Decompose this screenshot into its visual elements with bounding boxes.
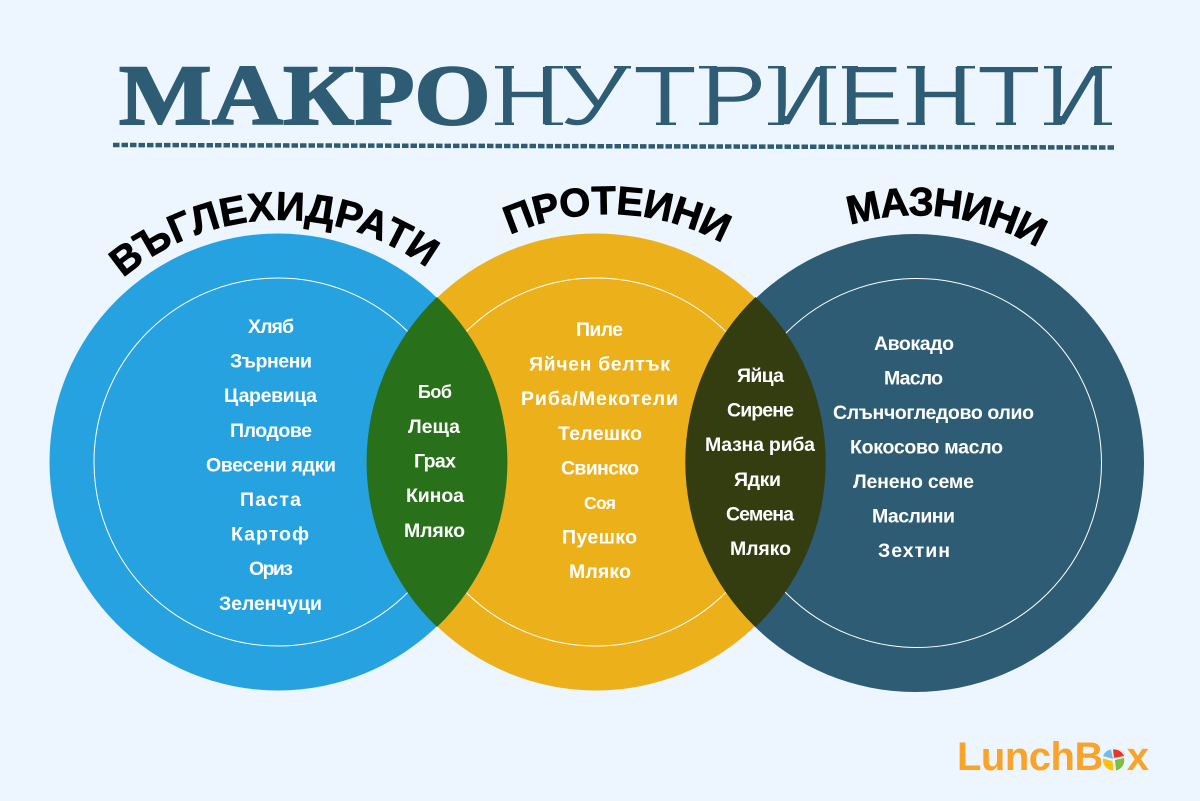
panel: carbohydrates circle [50, 234, 506, 690]
list: carbohydrates: Зърнени [230, 351, 312, 373]
list: proteins and fats overlap: Сирене [727, 400, 794, 422]
list: proteins: Соя [584, 493, 616, 513]
list: carbohydrates and proteins overlap: Грах [414, 450, 456, 472]
list: carbohydrates: Овесени ядки [206, 454, 336, 476]
title light-part slab serifs [495, 66, 1112, 125]
list: carbohydrates and proteins overlap: Мляко [404, 520, 465, 542]
list: proteins: Яйчен белтък [529, 354, 670, 376]
list: proteins: Риба/Мекотели [521, 388, 678, 410]
list: carbohydrates and proteins overlap: Боб [418, 382, 452, 402]
title dashed underline [113, 145, 1116, 148]
list: proteins: Пиле [576, 319, 623, 341]
list: fats: Кокосово масло [850, 436, 1003, 458]
list: proteins: Мляко [569, 561, 631, 583]
list: proteins and fats overlap: Семена [726, 503, 794, 525]
heading: carbohydrates: ВЪГЛЕХИДРАТИ [108, 192, 440, 276]
list: proteins and fats overlap: Мляко [730, 538, 791, 560]
list: carbohydrates: Картоф [231, 524, 309, 546]
list: proteins: Телешко [558, 423, 642, 445]
overlap: carbohydrates and proteins [367, 297, 507, 627]
title: МАКРО [119, 48, 491, 143]
title: НУТРИЕНТИ [493, 51, 1112, 152]
list: proteins and fats overlap [705, 365, 815, 560]
list: proteins and fats overlap: Ядки [734, 469, 781, 491]
list: carbohydrates and proteins overlap: Леща [408, 416, 460, 438]
panel: proteins circle [368, 234, 824, 690]
list: proteins [521, 319, 678, 583]
list: carbohydrates: Хляб [248, 316, 294, 338]
list: carbohydrates and proteins overlap [404, 382, 465, 542]
list: proteins: Пуешко [562, 527, 637, 549]
list: carbohydrates: Зеленчуци [219, 593, 322, 615]
panel: fats circle [686, 234, 1144, 692]
list: proteins and fats overlap: Мазна риба [705, 434, 815, 456]
list: fats: Слънчогледово олио [833, 402, 1034, 424]
list: carbohydrates and proteins overlap: Киноа [406, 485, 464, 507]
list: fats: Ленено семе [853, 471, 974, 493]
list: carbohydrates [206, 316, 336, 615]
list: proteins and fats overlap: Яйца [737, 365, 784, 387]
list: fats: Масло [884, 368, 943, 390]
list: carbohydrates: Царевица [224, 385, 317, 407]
heading: fats: МАЗНИНИ [846, 187, 1048, 246]
overlap: proteins and fats [685, 297, 826, 627]
list: fats: Зехтин [878, 540, 950, 562]
icon: pie in logo [1101, 748, 1126, 772]
list: proteins: Свинско [561, 457, 639, 479]
list: fats [833, 333, 1034, 562]
title [119, 48, 1112, 152]
heading: proteins: ПРОТЕИНИ [502, 186, 732, 242]
list: carbohydrates: Плодове [230, 420, 312, 442]
list: carbohydrates: Ориз [249, 558, 293, 580]
list: fats: Маслини [872, 506, 955, 528]
list: fats: Авокадо [874, 333, 954, 355]
logo: LunchBox: LunchBox [957, 735, 1149, 779]
list: carbohydrates: Паста [240, 489, 301, 511]
